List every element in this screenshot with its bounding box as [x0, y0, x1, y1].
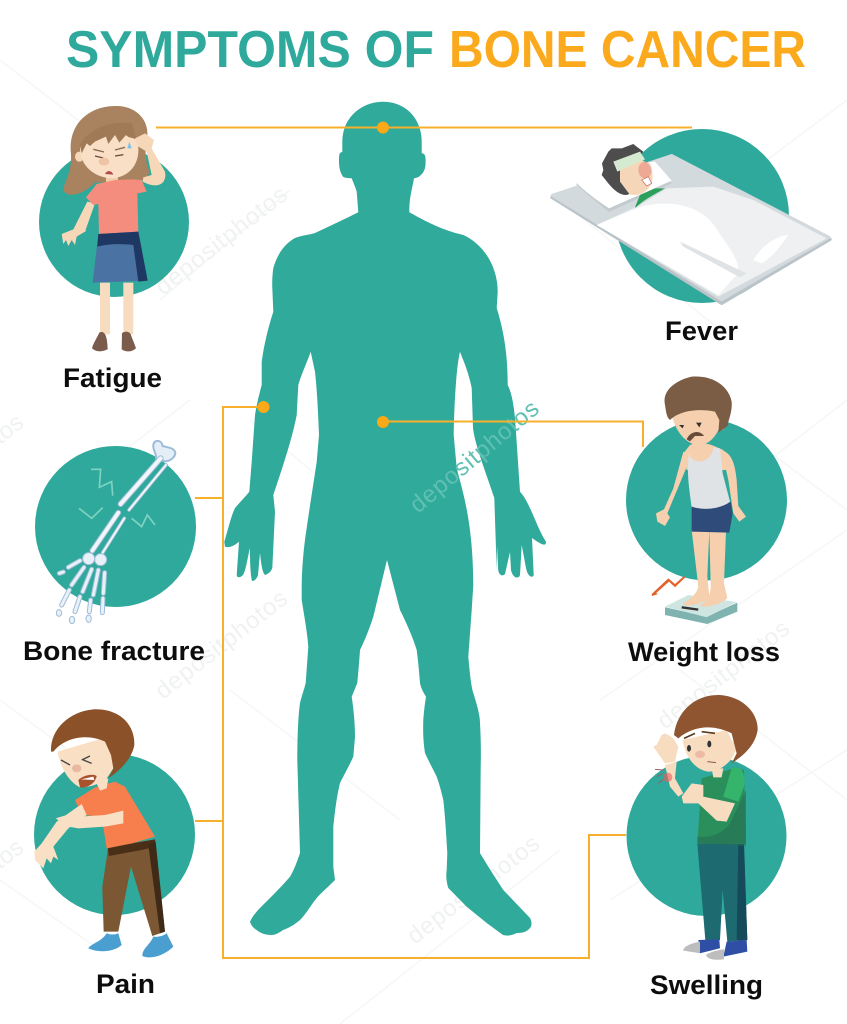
circle: weight loss — [626, 420, 787, 580]
watermark on body: depositphotos — [405, 395, 544, 519]
icon: boy with swollen arm — [653, 695, 758, 960]
label: bone fracture: Bone fracture — [23, 636, 205, 666]
circle: fever — [615, 129, 789, 303]
panel: swelling — [626, 695, 786, 1000]
icon: thin man on scale — [652, 376, 746, 624]
icon: tired girl — [62, 106, 165, 351]
body silhouette — [224, 102, 546, 936]
label: swelling: Swelling — [650, 970, 763, 1000]
label: fatigue: Fatigue — [63, 363, 162, 393]
icon: fractured arm bones — [56, 441, 175, 624]
watermark: depositphotos — [150, 585, 293, 705]
marker dots — [258, 122, 389, 428]
watermark: depositphotos — [652, 615, 795, 735]
panel: fever — [552, 129, 830, 346]
label: weight loss: Weight loss — [628, 637, 780, 667]
panel: weight loss — [626, 376, 787, 667]
icon: boy in pain — [34, 709, 173, 957]
circle: swelling — [626, 756, 786, 916]
watermark — [0, 181, 795, 950]
label: fever: Fever — [665, 316, 738, 346]
panel: bone fracture — [23, 441, 205, 666]
connector lines — [156, 128, 692, 958]
title — [66, 21, 806, 79]
label: pain: Pain — [96, 969, 155, 999]
circle: bone fracture — [35, 446, 196, 607]
panel: pain — [34, 709, 195, 999]
watermark: depositphotos — [150, 181, 293, 301]
circle: pain — [34, 754, 195, 915]
title: SYMPTOMS OF — [66, 21, 434, 79]
panel: fatigue — [39, 106, 189, 393]
watermark: depositphotos — [402, 830, 545, 950]
title: BONE CANCER — [449, 21, 806, 79]
circle: fatigue — [39, 147, 189, 297]
icon: sick person in bed — [552, 144, 830, 303]
